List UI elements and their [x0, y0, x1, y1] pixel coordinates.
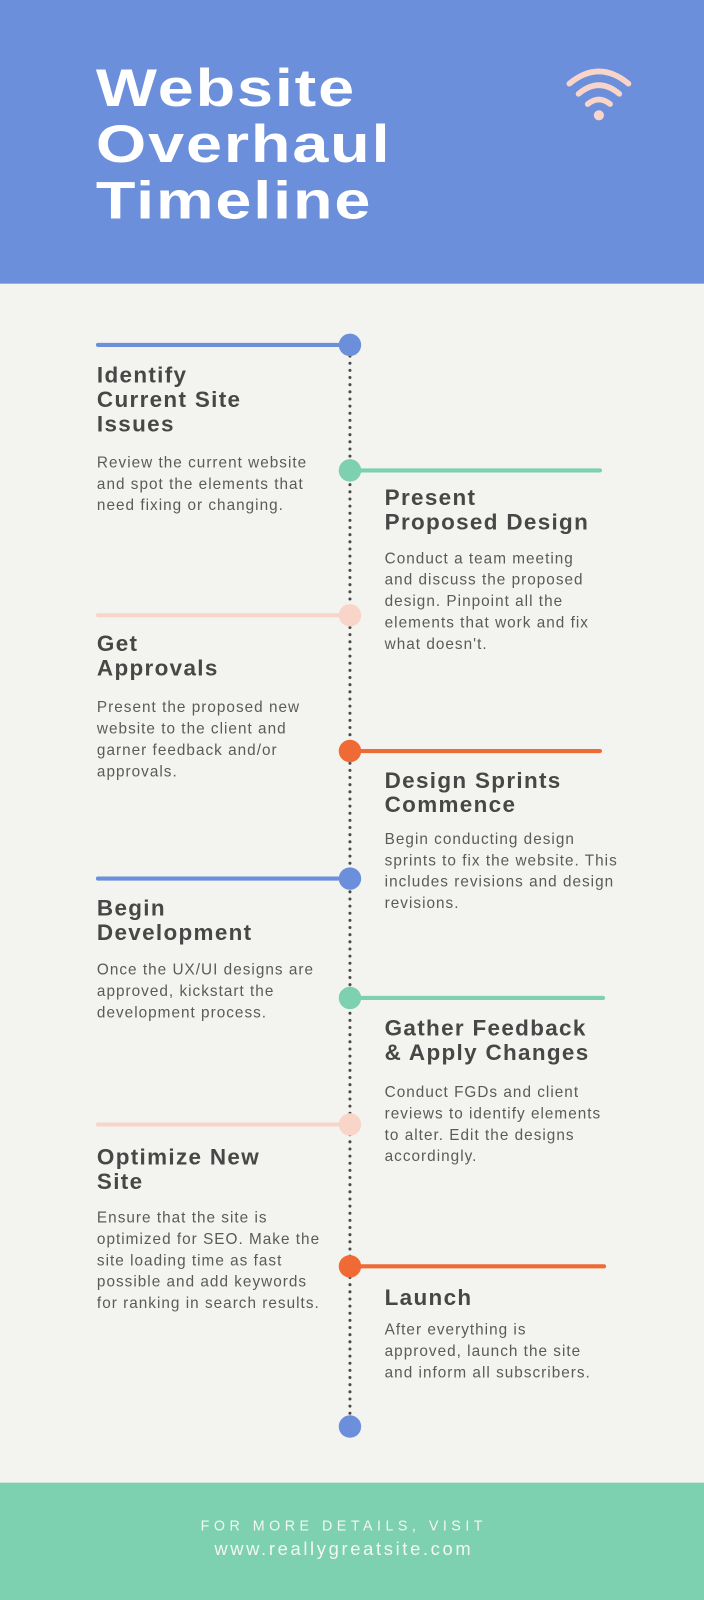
step 6: accordingly.: [385, 1148, 477, 1165]
step 6: & Apply Changes: [385, 1040, 590, 1065]
step 4: sprints to fix the website. This: [385, 852, 618, 869]
step 1: Current Site: [97, 387, 241, 412]
timeline spine: [348, 356, 352, 1415]
step 2: Present: [385, 485, 476, 510]
text: approvals.: [97, 763, 178, 781]
step 6: Gather Feedback: [385, 1015, 587, 1041]
step 3: garner feedback and/or: [97, 742, 278, 759]
step 4: revisions.: [385, 895, 459, 912]
footer text: [201, 1517, 487, 1559]
step 8: Launch: [385, 1285, 472, 1310]
step 1: and spot the elements that: [97, 476, 304, 493]
step 2: Proposed Design: [385, 509, 589, 535]
step 5: approved, kickstart the: [97, 983, 274, 1000]
end dot: [339, 1415, 361, 1438]
footer: [0, 1483, 704, 1600]
step 5: Begin: [97, 895, 166, 920]
step 8: [338, 1255, 606, 1382]
step 1: [96, 334, 362, 514]
step 7: Optimize New: [97, 1144, 260, 1169]
step 2: design. Pinpoint all the: [385, 593, 563, 610]
step 7: for ranking in search results.: [97, 1295, 320, 1312]
step 1: need fixing or changing.: [97, 497, 284, 514]
step 6: to alter. Edit the designs: [385, 1127, 575, 1144]
step 2: Conduct a team meeting: [385, 550, 574, 567]
step 7: possible and add keywords: [97, 1273, 307, 1291]
step 8: approved, launch the site: [385, 1343, 581, 1360]
step 7: optimized for SEO. Make the: [97, 1231, 320, 1248]
step 1: Identify: [97, 362, 187, 388]
step 1: Issues: [97, 411, 175, 437]
step 3: Present the proposed new: [97, 699, 300, 716]
step 4: Commence: [385, 792, 516, 817]
title: Overhaul: [96, 115, 391, 174]
step 3: Approvals: [97, 655, 219, 681]
step 7: Ensure that the site is: [97, 1209, 268, 1227]
step 6: Conduct FGDs and client: [385, 1084, 579, 1101]
step 3: website to the client and: [97, 720, 287, 738]
step 3: [96, 604, 362, 781]
step 7: [96, 1113, 362, 1312]
text: what doesn't.: [385, 636, 488, 653]
header: [0, 0, 704, 284]
step 3: Get: [97, 631, 138, 656]
step 5: Development: [97, 919, 252, 945]
title: Timeline: [96, 171, 372, 231]
step 6: reviews to identify elements: [385, 1105, 601, 1122]
step 7: site loading time as fast: [97, 1252, 282, 1269]
step 4: includes revisions and design: [385, 873, 614, 891]
step 4: Design Sprints: [385, 767, 562, 793]
step 5: development process.: [97, 1004, 267, 1021]
step 4: Begin conducting design: [385, 831, 575, 848]
footer text: www.reallygreatsite.com: [214, 1539, 473, 1559]
step 1: Review the current website: [97, 454, 307, 471]
icon: wifi: [566, 68, 632, 120]
step 6: [338, 986, 605, 1165]
step 5: [96, 867, 362, 1021]
title: Website: [96, 59, 356, 118]
step 7: Site: [97, 1168, 143, 1194]
step 2: [338, 459, 602, 653]
step 8: After everything is: [385, 1321, 527, 1339]
step 2: elements that work and fix: [385, 614, 589, 632]
footer text: FOR MORE DETAILS, VISIT: [201, 1517, 487, 1534]
step 2: and discuss the proposed: [385, 571, 584, 589]
step 8: and inform all subscribers.: [385, 1364, 591, 1382]
title: [96, 59, 391, 231]
step 5: Once the UX/UI designs are: [97, 961, 314, 979]
step 4: [338, 740, 618, 912]
